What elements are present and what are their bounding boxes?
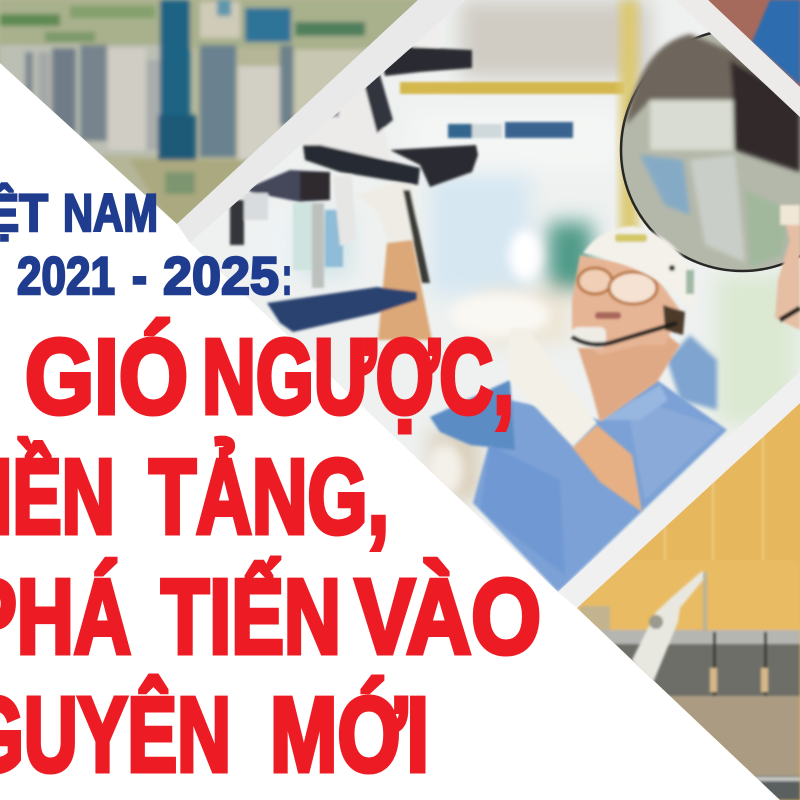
panel: spinning machines photo (570, 400, 800, 800)
panel: top-right corner photo (708, 0, 800, 87)
white gripper arm (632, 571, 708, 690)
heading: Việt Nam 2021 - 2025: 2021 (17, 247, 115, 306)
heading: Việt Nam 2021 - 2025 (0, 182, 292, 306)
background worker (667, 335, 717, 410)
panel: city skyline photo (0, 0, 420, 230)
worker face (572, 255, 685, 355)
background blur of the factory (255, 0, 796, 500)
title: red headline: VÀO (355, 558, 541, 676)
title: red headline: NGƯỢC, (202, 318, 514, 436)
title: red headline: GIÓ (25, 318, 188, 436)
title: red headline: MỚI (270, 676, 429, 794)
yellow rail (400, 82, 625, 94)
worker neck and arm (572, 325, 680, 512)
title: red headline: TẢNG, (149, 437, 389, 556)
icon: industrial fan (621, 29, 800, 271)
worker shirt (430, 380, 727, 592)
title: red headline: TIẾN (161, 558, 341, 676)
blurred white gloves in background (427, 230, 550, 496)
worker glove (507, 328, 597, 447)
heading: Việt Nam 2021 - 2025: 2025 (163, 247, 279, 306)
heading: Việt Nam 2021 - 2025: NAM (63, 184, 158, 243)
title: red headline (0, 318, 541, 794)
panel: factory worker photo (190, 0, 800, 592)
second worker face (775, 204, 800, 330)
heading: Việt Nam 2021 - 2025: : (282, 247, 292, 306)
machine arm (230, 25, 478, 340)
diagonal light stripes (177, 0, 800, 608)
blue strip in background (448, 122, 573, 138)
worker helmet (582, 224, 696, 296)
heading: Việt Nam 2021 - 2025: - (132, 247, 147, 306)
